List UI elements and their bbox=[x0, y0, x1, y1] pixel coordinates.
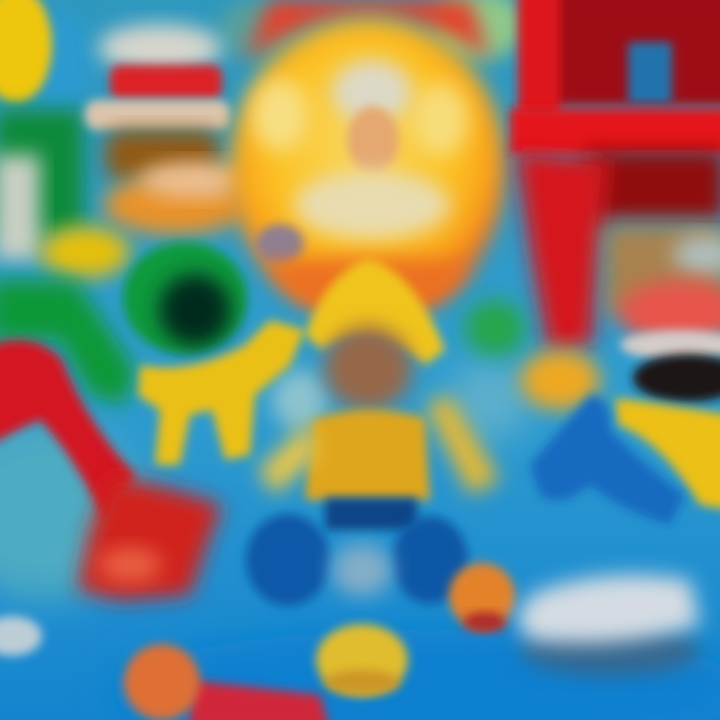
icon: lower orange bbox=[265, 258, 475, 315]
icon: right leg bbox=[392, 516, 468, 604]
icon: right arm bbox=[425, 395, 500, 495]
icon: tan interior bbox=[605, 225, 720, 315]
icon: red shelf bbox=[510, 108, 720, 154]
icon: ring hole bbox=[159, 274, 231, 346]
icon: orange ball bbox=[449, 563, 515, 629]
panel: orange portrait disc bbox=[230, 18, 506, 318]
icon: portrait hair bbox=[332, 60, 412, 124]
icon: dumbbell ball bbox=[124, 644, 200, 720]
icon: red post bbox=[515, 150, 610, 350]
icon: disc bbox=[230, 18, 506, 318]
icon: orange base bbox=[103, 175, 247, 235]
icon: right glow bbox=[412, 84, 468, 156]
icon: white box shadow bbox=[520, 624, 700, 676]
panel: left green and yellow toys bbox=[0, 242, 305, 465]
icon: ball shadow bbox=[463, 612, 507, 632]
icon: left glow bbox=[252, 79, 308, 151]
icon: blue toy bbox=[530, 395, 685, 525]
icon: blue square bbox=[628, 42, 672, 104]
icon: yellow patch bbox=[40, 226, 130, 278]
icon: brown base bbox=[105, 130, 220, 180]
icon: pale top bbox=[673, 235, 720, 275]
icon: red cap bbox=[618, 280, 720, 344]
icon: body bbox=[305, 409, 430, 500]
icon: white piece bbox=[0, 616, 42, 656]
icon: red star base bbox=[78, 475, 222, 600]
icon: orange yellow foot bbox=[520, 350, 600, 410]
icon: white box bbox=[515, 575, 700, 643]
icon: red post top bbox=[518, 0, 560, 115]
icon: face bbox=[324, 326, 412, 410]
icon: cream band bbox=[85, 100, 230, 130]
icon: dark red under shelf bbox=[585, 150, 720, 220]
icon: portrait face bbox=[347, 106, 399, 174]
icon: yellow body bbox=[615, 398, 720, 510]
icon: waist bbox=[325, 498, 417, 530]
icon: yellow hat bbox=[305, 258, 445, 365]
icon: white column bbox=[0, 155, 40, 260]
icon: small green block bbox=[465, 300, 525, 356]
panel: right toy bbox=[520, 235, 720, 525]
panel: red structure bbox=[510, 0, 720, 350]
icon: green ring bbox=[123, 242, 247, 354]
icon: centre gap bbox=[332, 544, 392, 596]
icon: yellow dog bbox=[138, 320, 305, 465]
icon: yellow pill bbox=[316, 624, 408, 696]
icon: base highlight bbox=[98, 547, 162, 583]
icon: orange highlight bbox=[140, 162, 250, 198]
panel: top left toys bbox=[0, 0, 130, 278]
icon: red arch bbox=[0, 340, 135, 520]
icon: small flag bbox=[256, 224, 304, 264]
icon: pill band bbox=[324, 670, 400, 694]
panel: red arc behind disc bbox=[245, 0, 490, 60]
icon: left leg bbox=[246, 514, 330, 606]
icon: left arm bbox=[258, 420, 318, 495]
panel: red left toy bbox=[0, 340, 222, 600]
panel: central figure bbox=[246, 258, 500, 606]
icon: green bar bbox=[0, 280, 135, 405]
icon: dumbbell bar bbox=[190, 680, 330, 720]
icon: green pillar bbox=[0, 110, 83, 235]
icon: portrait body bbox=[294, 171, 450, 239]
icon: black band bbox=[633, 354, 720, 402]
panel: mushroom toy bbox=[85, 24, 250, 235]
icon: yellow block bbox=[0, 0, 52, 103]
icon: white band bbox=[620, 330, 720, 360]
icon: dark red top bbox=[545, 0, 720, 105]
icon: white top bbox=[98, 24, 222, 72]
panel: floor toys bbox=[0, 563, 700, 720]
icon: red band bbox=[110, 65, 222, 99]
